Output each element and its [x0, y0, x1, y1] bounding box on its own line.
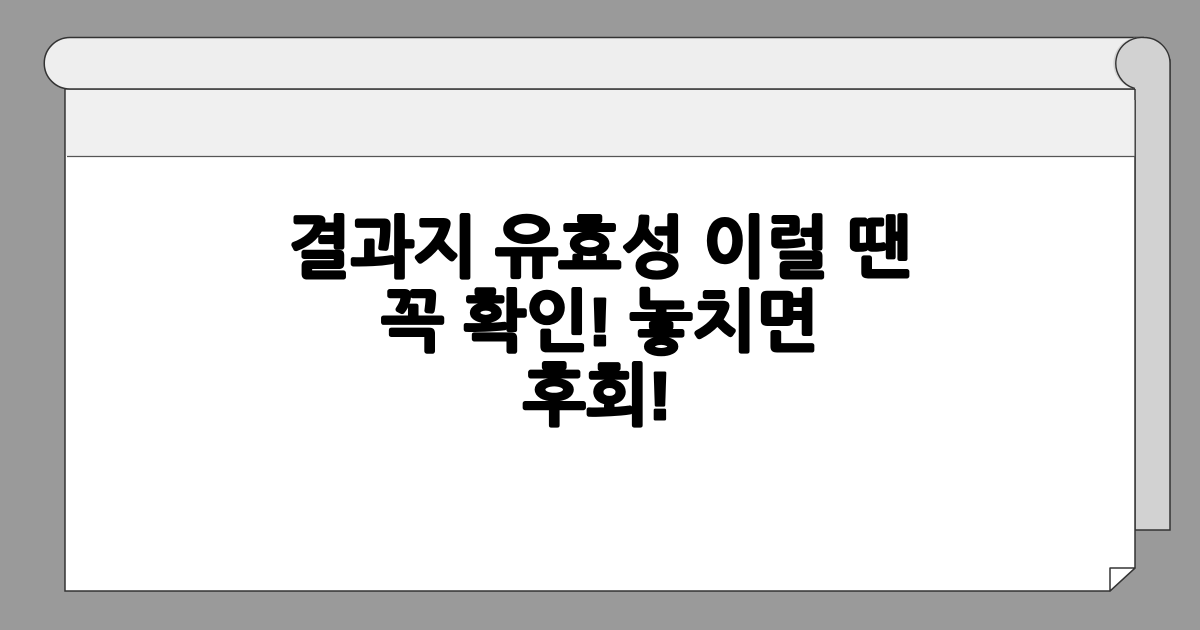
title: 후회! [523, 359, 671, 434]
title: 꼭 확인! 놓치면 [381, 285, 819, 360]
title: 결과지 유효성 이럴 땐 [288, 211, 910, 286]
top scroll roll [44, 38, 1144, 89]
right scroll back band [1135, 60, 1170, 530]
paper sheet [65, 89, 1135, 591]
title [288, 211, 910, 434]
page fold [1110, 568, 1135, 591]
header band [66, 90, 1135, 156]
scroll end cap [1113, 37, 1170, 100]
